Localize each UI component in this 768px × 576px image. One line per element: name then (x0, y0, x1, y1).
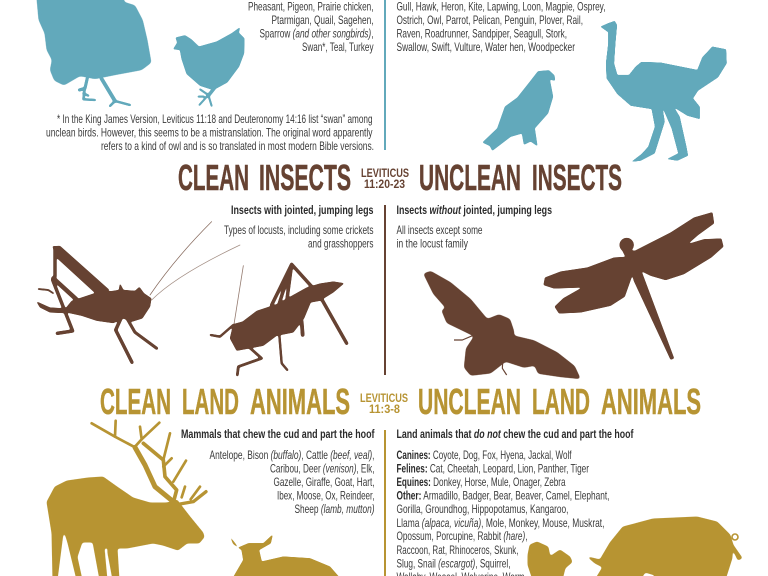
icon: turkey silhouette (36, 0, 151, 106)
heading: unclean land animals: UNCLEAN (418, 381, 521, 422)
reference: Leviticus 11:20-23: 11:20-23 (364, 177, 405, 191)
icon: elk silhouette (47, 421, 206, 576)
text block: unclean land animal list: Raccoon, Rat, Rhinoceros, Skunk, (396, 543, 518, 557)
text block: clean land animal list: Sheep (lamb, mutton) (294, 502, 374, 516)
text block: clean insects description: Types of locusts, including some crickets (224, 223, 374, 237)
panel: clean insects (37, 203, 374, 375)
text: unclean insects subheading: Insects without jointed, jumping legs (396, 203, 552, 217)
text block: clean land animal list: Antelope, Bison (buffalo), Cattle (beef, veal), (210, 448, 374, 462)
icon: dragonfly silhouette (544, 212, 723, 360)
text: clean land animals subheading: Mammals that chew the cud and part the hoof (181, 427, 375, 441)
heading: unclean insects: UNCLEAN (419, 157, 521, 198)
footnote: swan mistranslation: refers to a kind of owl and is so translated in most modern Bible versions. (101, 139, 374, 153)
heading: clean insects: CLEAN (178, 157, 249, 198)
text block: clean bird list: Ptarmigan, Quail, Sagehen, (272, 13, 374, 27)
text block: clean bird list (248, 0, 374, 54)
icon: moth silhouette (423, 271, 581, 379)
text block: clean bird list: Sparrow (and other songbirds), (260, 26, 374, 40)
text block: clean land animal list (210, 448, 374, 516)
text block: unclean insects description: All insects except some (396, 223, 483, 237)
reference: Leviticus 11:3-8: LEVITICUS (360, 391, 408, 405)
divider: birds (384, 0, 386, 150)
text block: unclean bird list: Swallow, Swift, Vulture, Water hen, Woodpecker (396, 40, 575, 54)
divider: land animals (384, 430, 386, 576)
text block: clean bird list: Swan*, Teal, Turkey (302, 40, 374, 54)
icon: cricket silhouette (37, 222, 240, 362)
heading: clean land animals: CLEAN (100, 381, 171, 422)
text block: unclean bird list: Raven, Roadrunner, Sandpiper, Seagull, Stork, (396, 26, 567, 40)
divider: insects (384, 205, 386, 375)
footnote: swan mistranslation: unclean birds. However, this seems to be a mistranslation. The original word apparently (46, 126, 372, 140)
text block: unclean land animal list: Llama (alpaca, vicuña), Mole, Monkey, Mouse, Muskrat, (396, 516, 604, 530)
icon: squirrel silhouette (528, 542, 572, 576)
heading: unclean land animals (418, 381, 701, 422)
reference: Leviticus 11:20-23: LEVITICUS (361, 166, 409, 180)
panel: clean land animals (47, 421, 375, 576)
text block: unclean land animal list: Other: Armadillo, Badger, Bear, Beaver, Camel, Elephant, (396, 488, 610, 502)
text block: unclean insects description: in the locust family (396, 236, 468, 250)
footnote: swan mistranslation: * In the King James Version, Leviticus 11:18 and Deuteronomy 14:16 list “swan” among (57, 112, 372, 126)
text block: unclean land animal list: Gorilla, Groundhog, Hippopotamus, Kangaroo, (396, 502, 568, 516)
text block: unclean land animal list: Opossum, Porcupine, Rabbit (hare), (396, 529, 527, 543)
panel: unclean land animals (396, 427, 742, 576)
icon: hawk silhouette (483, 70, 555, 151)
icon: doe silhouette (230, 535, 342, 576)
reference: Leviticus 11:3-8 (360, 391, 408, 416)
text block: clean insects description (224, 223, 374, 250)
text: unclean land animals subheading: Land animals that do not chew the cud and part the hoof (396, 427, 634, 441)
heading: clean insects: INSECTS (259, 157, 351, 198)
heading: unclean land animals: LAND (532, 381, 590, 422)
panel: unclean birds (396, 0, 727, 162)
icon: ostrich silhouette (601, 21, 727, 162)
footnote: swan mistranslation (46, 112, 374, 153)
text block: clean land animal list: Caribou, Deer (venison), Elk, (270, 462, 374, 476)
text block: unclean bird list (396, 0, 606, 54)
text block: clean land animal list: Ibex, Moose, Ox, Reindeer, (277, 488, 374, 502)
icon: hen silhouette (173, 27, 244, 106)
heading: unclean land animals: ANIMALS (601, 381, 701, 422)
text block: unclean land animal list (396, 448, 610, 576)
reference: Leviticus 11:20-23 (361, 166, 409, 191)
text block: clean land animal list: Gazelle, Giraffe, Goat, Hart, (274, 475, 374, 489)
heading: clean land animals: LAND (182, 381, 239, 422)
panel: clean birds (36, 0, 374, 153)
text block: unclean insects description (396, 223, 483, 250)
icon: grasshopper silhouette (211, 264, 347, 375)
text block: unclean land animal list: Canines: Coyote, Dog, Fox, Hyena, Jackal, Wolf (396, 448, 572, 462)
text block: clean insects description: and grasshoppers (308, 236, 374, 250)
heading: clean land animals (100, 381, 350, 422)
text block: unclean land animal list: Equines: Donkey, Horse, Mule, Onager, Zebra (396, 475, 566, 489)
text block: unclean land animal list: Slug, Snail (escargot), Squirrel, (396, 556, 510, 570)
text block: unclean bird list: Ostrich, Owl, Parrot, Pelican, Penguin, Plover, Rail, (396, 13, 583, 27)
heading: clean land animals: ANIMALS (250, 381, 350, 422)
text block: unclean land animal list: Felines: Cat, Cheetah, Leopard, Lion, Panther, Tiger (396, 462, 589, 476)
icon: pig silhouette (588, 517, 742, 576)
heading: unclean insects: INSECTS (532, 157, 622, 198)
panel: unclean insects (396, 203, 723, 379)
text: clean insects subheading: Insects with jointed, jumping legs (231, 203, 374, 217)
reference: Leviticus 11:3-8: 11:3-8 (369, 402, 400, 416)
